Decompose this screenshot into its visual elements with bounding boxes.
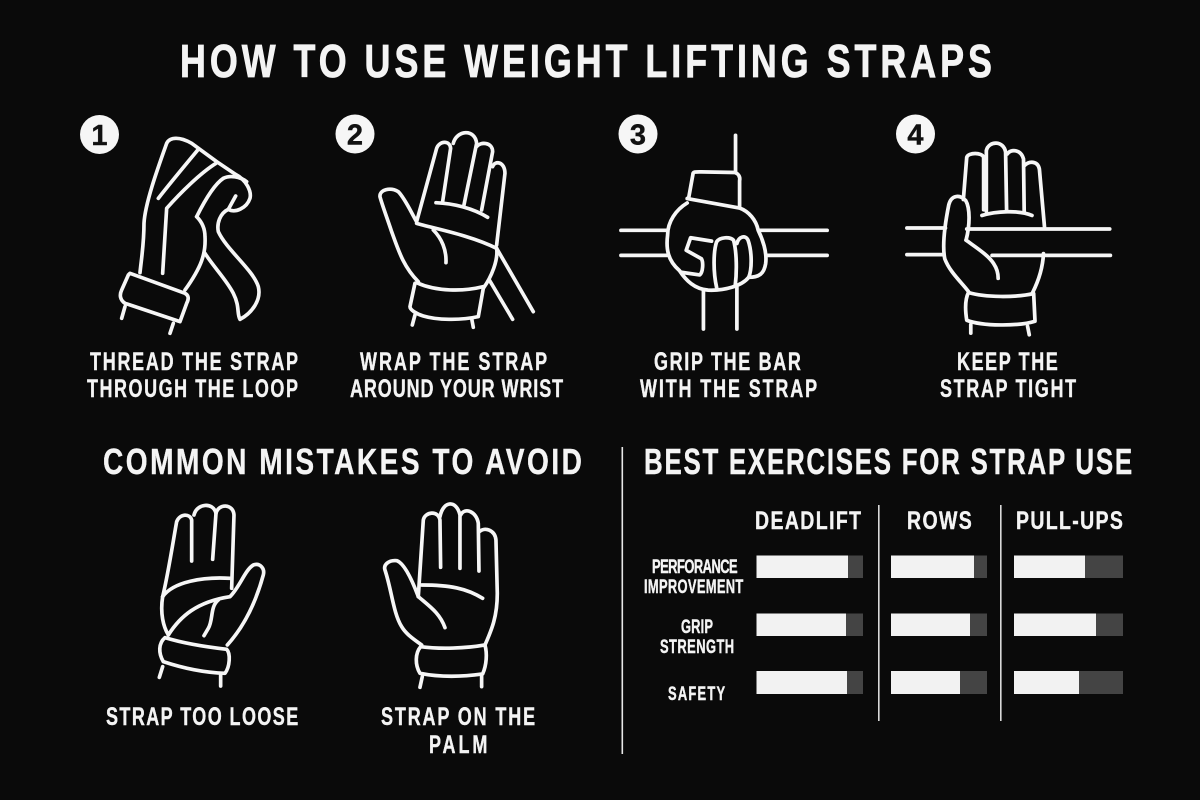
row labels: IMPROVEMENT [644, 577, 743, 598]
caption: strap on the palm: STRAP ON THE [381, 702, 535, 731]
number badge 2 [336, 114, 374, 154]
bars: deadlift [756, 556, 863, 694]
step 2 caption [350, 347, 564, 403]
number badge 3: 3 [630, 120, 646, 152]
step 3 caption: GRIP THE BAR [654, 347, 801, 376]
step 3 caption: WITH THE STRAP [640, 374, 817, 403]
step 4 caption: STRAP TIGHT [940, 374, 1077, 403]
icon: hand threading strap [120, 138, 259, 333]
number badge 1 [80, 115, 119, 154]
caption: strap on the palm [381, 702, 535, 759]
row labels [644, 557, 743, 705]
bar chart [756, 556, 1123, 694]
panel: best exercises [644, 442, 1132, 721]
icon: loose strap hand [159, 505, 264, 686]
caption: strap too loose: STRAP TOO LOOSE [106, 702, 298, 731]
step 1 caption: THREAD THE STRAP [90, 347, 298, 376]
bars: pull-ups [1014, 556, 1123, 694]
step 4 caption: KEEP THE [957, 347, 1058, 376]
step 2 caption: WRAP THE STRAP [360, 347, 547, 376]
icon: strap on palm hand [385, 504, 497, 687]
icon: fist gripping bar [621, 135, 827, 329]
step 3 [618, 114, 827, 403]
number badge 3 [618, 114, 658, 154]
row labels: SAFETY [668, 684, 725, 705]
number badge 1: 1 [91, 120, 108, 152]
step 3 caption [640, 347, 817, 403]
caption: strap on the palm: PALM [429, 730, 487, 759]
step 2 caption: AROUND YOUR WRIST [350, 374, 564, 403]
panel: steps [80, 114, 1110, 403]
panel: common mistakes [103, 442, 582, 759]
step 2 [336, 114, 564, 403]
heading: common mistakes: COMMON MISTAKES TO AVOID [103, 442, 582, 482]
column headers: DEADLIFT [755, 507, 861, 535]
column headers: PULL-UPS [1016, 507, 1123, 535]
step 1 caption: THROUGH THE LOOP [87, 374, 298, 403]
row labels: STRENGTH [660, 637, 734, 658]
step 4 [896, 114, 1110, 403]
row labels: GRIP [681, 617, 713, 638]
number badge 4: 4 [907, 120, 924, 152]
row labels: PERFORANCE [652, 557, 738, 578]
step 1 caption [87, 347, 298, 403]
column headers [755, 507, 1123, 535]
icon: hand with strap around wrist [380, 133, 533, 327]
number badge 2: 2 [347, 120, 363, 152]
number badge 4 [896, 114, 935, 154]
step 4 caption [940, 347, 1077, 403]
column headers: ROWS [907, 507, 972, 535]
heading: best exercises: BEST EXERCISES FOR STRAP USE [644, 442, 1132, 482]
icon: open hand with tight strap [907, 143, 1110, 335]
step 1 [80, 115, 298, 403]
bars: rows [891, 556, 987, 694]
title: HOW TO USE WEIGHT LIFTING STRAPS [180, 36, 992, 87]
